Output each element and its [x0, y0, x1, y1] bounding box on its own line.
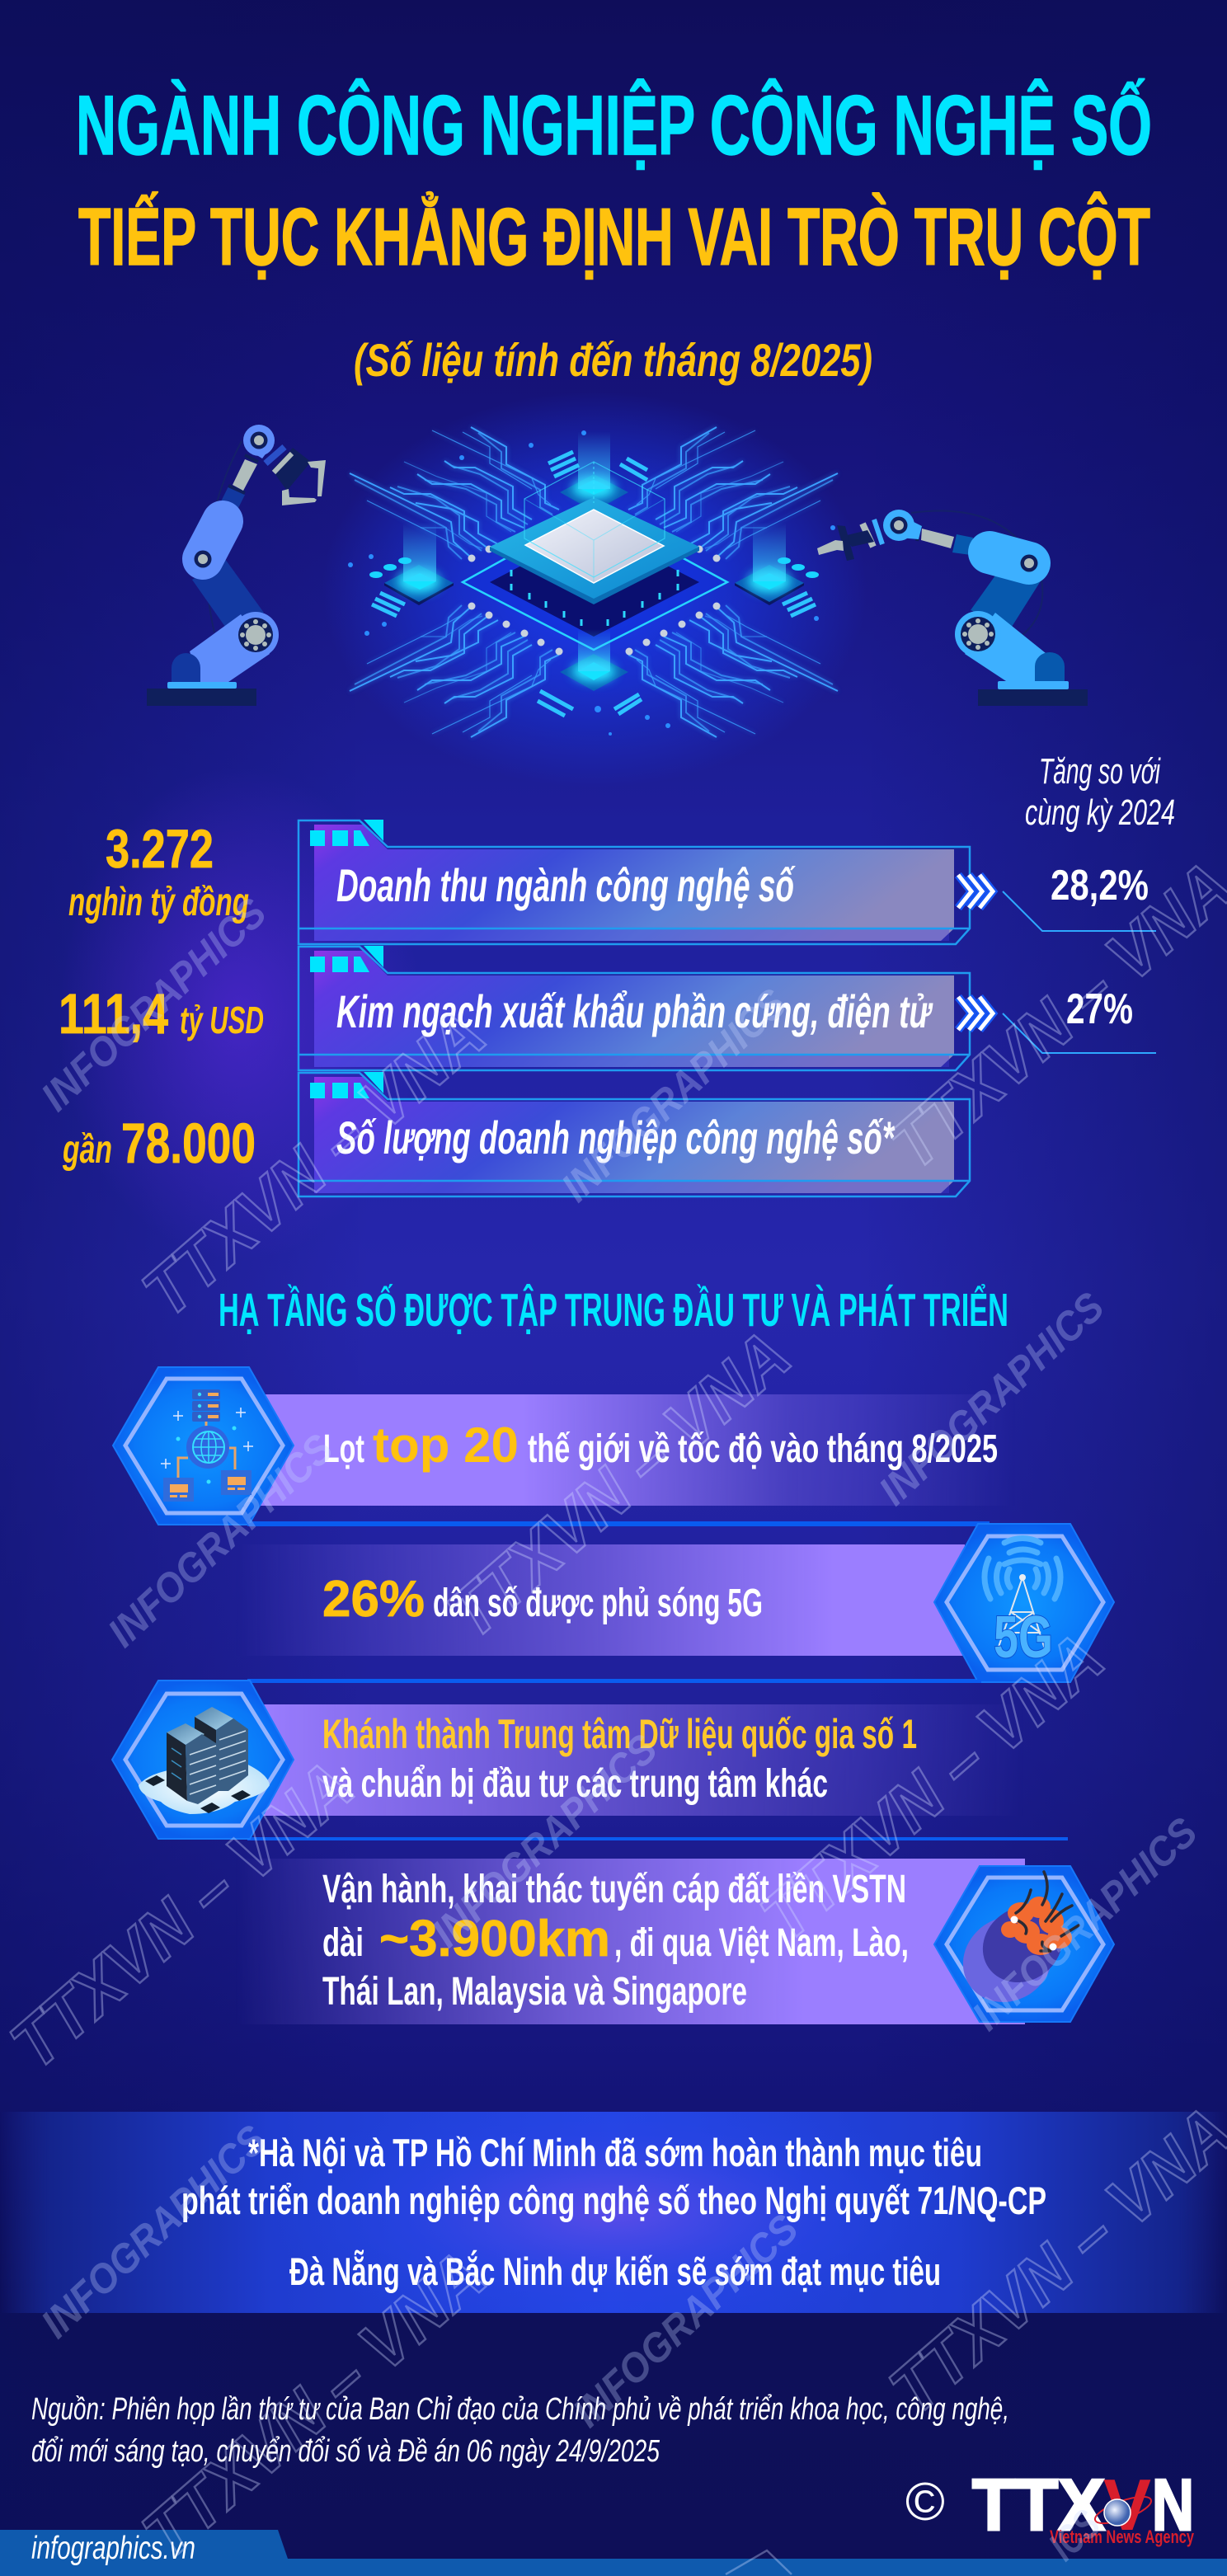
- panel: kim ngạch: Kim ngạch xuất khẩu phần cứng, điện tử: [336, 985, 933, 1037]
- watermarks: TTXVN – VNA: [746, 1619, 1117, 1956]
- source note: [31, 2392, 1009, 2469]
- watermarks: INFOGRAPHICS: [870, 1283, 1112, 1514]
- top chip: [560, 431, 628, 511]
- logo: TTXVN: [972, 2464, 1195, 2547]
- stat: doanh nghiệp value: [62, 1112, 256, 1175]
- row 1: tốc độ: Lọt: [323, 1427, 364, 1471]
- panel: kim ngạch: [299, 946, 970, 1070]
- row 2: 5G: 26%: [322, 1571, 425, 1628]
- watermarks: INFOGRAPHICS: [32, 889, 275, 1120]
- watermarks: INFOGRAPHICS: [552, 980, 795, 1210]
- row 3: trung tâm dữ liệu: Khánh thành Trung tâm Dữ liệu quốc gia số 1: [322, 1711, 917, 1757]
- stat: xuất khẩu value: [59, 982, 264, 1046]
- panel: footnote: Đà Nẵng và Bắc Ninh dự kiến sẽ sớm đạt mục tiêu: [289, 2249, 941, 2293]
- growth value 28,2%: [1003, 862, 1156, 931]
- copyright mark: ©: [905, 2471, 945, 2531]
- row 3: trung tâm dữ liệu: [112, 1680, 1068, 1840]
- watermarks: TTXVN – VNA: [128, 2236, 499, 2574]
- footer stripe and website: infographics.vn: [31, 2531, 195, 2566]
- logo: TTXVN: TTX: [972, 2464, 1105, 2545]
- row 3: trung tâm dữ liệu: và chuẩn bị đầu tư các trung tâm khác: [322, 1762, 828, 1806]
- watermarks: INFOGRAPHICS: [963, 1808, 1206, 2039]
- illustration: right robot arm: [817, 510, 1088, 706]
- watermarks: INFOGRAPHICS: [423, 1725, 665, 1956]
- row 1: tốc độ: thế giới về tốc độ vào tháng 8/2025: [528, 1427, 998, 1471]
- side chip left: [369, 522, 454, 605]
- watermarks: [0, 847, 1227, 2574]
- watermarks: INFOGRAPHICS: [32, 2116, 275, 2347]
- watermarks: ICS: [1040, 2501, 1109, 2569]
- illustration: microchip with circuits: [348, 427, 838, 737]
- row 2: 5G: [235, 1523, 1114, 1682]
- subtitle: (Số liệu tính đến tháng 8/2025): [354, 334, 872, 386]
- row 4: cáp VSTN: [235, 1859, 1114, 2024]
- main chip: [490, 462, 699, 604]
- row 1: tốc độ: top 20: [373, 1417, 519, 1473]
- row 4: cáp VSTN: ~3.900km: [379, 1911, 610, 1967]
- watermarks: TTXVN – VNA: [0, 1746, 367, 2084]
- watermarks: INFOGRAPHICS: [564, 2205, 806, 2436]
- growth value 27%: 27%: [1066, 985, 1133, 1033]
- panel: doanh thu: [299, 820, 970, 944]
- icon: data center racks: [112, 1681, 294, 1839]
- row 4: cáp VSTN: , đi qua Việt Nam, Lào,: [614, 1921, 909, 1965]
- illustration: left robot arm: [147, 425, 326, 706]
- icon: network globe: [113, 1367, 294, 1525]
- row 1: tốc độ: [113, 1367, 1017, 1525]
- row 4: cáp VSTN: Thái Lan, Malaysia và Singapore: [322, 1970, 747, 2014]
- watermarks: TTXVN – VNA: [128, 994, 499, 1332]
- arrow: doanh thu: [958, 875, 993, 908]
- stripes around chips: [372, 452, 816, 716]
- icon: 5G tower: [934, 1524, 1114, 1682]
- stat: doanh nghiệp value: 78.000: [121, 1112, 256, 1175]
- watermarks: TTXVN – VNA: [433, 1316, 804, 1653]
- growth value 28,2%: 28,2%: [1051, 862, 1149, 910]
- title: [76, 78, 1152, 282]
- stat: xuất khẩu value: 111,4: [59, 982, 168, 1046]
- column heading: growth: Tăng so với: [1039, 751, 1161, 792]
- stat: doanh thu value: [68, 818, 249, 924]
- panel: footnote: [0, 2089, 1227, 2336]
- watermarks: INFOGRAPHICS: [99, 1425, 341, 1656]
- footer stripe and website: [0, 2530, 1227, 2576]
- icon: fiber cable: [934, 1866, 1114, 2022]
- connector pads: [468, 546, 721, 655]
- logo: TTXVN: N: [1152, 2464, 1194, 2545]
- row 4: cáp VSTN: Vận hành, khai thác tuyến cáp đất liền VSTN: [322, 1868, 906, 1911]
- logo: TTXVN: V: [1103, 2464, 1151, 2545]
- dashed dots: [348, 430, 835, 736]
- row 2: 5G: dân số được phủ sóng 5G: [433, 1582, 763, 1625]
- growth value 27%: [1003, 985, 1156, 1053]
- bottom chip: [560, 629, 628, 691]
- lower diamond and ticks: [463, 510, 727, 650]
- side chip right: [735, 522, 819, 605]
- row 4: cáp VSTN: dài: [322, 1921, 364, 1965]
- panel: số lượng doanh nghiệp: [299, 1072, 970, 1196]
- arrow: kim ngạch: [958, 997, 993, 1030]
- stat: doanh thu value: 3.272: [106, 818, 214, 879]
- panel: doanh thu: Doanh thu ngành công nghệ số: [336, 859, 796, 911]
- stat: doanh nghiệp value: gần: [62, 1128, 112, 1172]
- column heading: growth: [1025, 751, 1175, 833]
- stat: doanh thu value: nghìn tỷ đồng: [68, 881, 249, 924]
- source note: đổi mới sáng tạo, chuyển đổi số và Đề án 06 ngày 24/9/2025: [31, 2434, 661, 2469]
- stat: xuất khẩu value: tỷ USD: [180, 999, 264, 1041]
- panel: số lượng doanh nghiệp: Số lượng doanh nghiệp công nghệ số*: [336, 1112, 895, 1163]
- icon: 5G tower: 5G: [994, 1605, 1053, 1671]
